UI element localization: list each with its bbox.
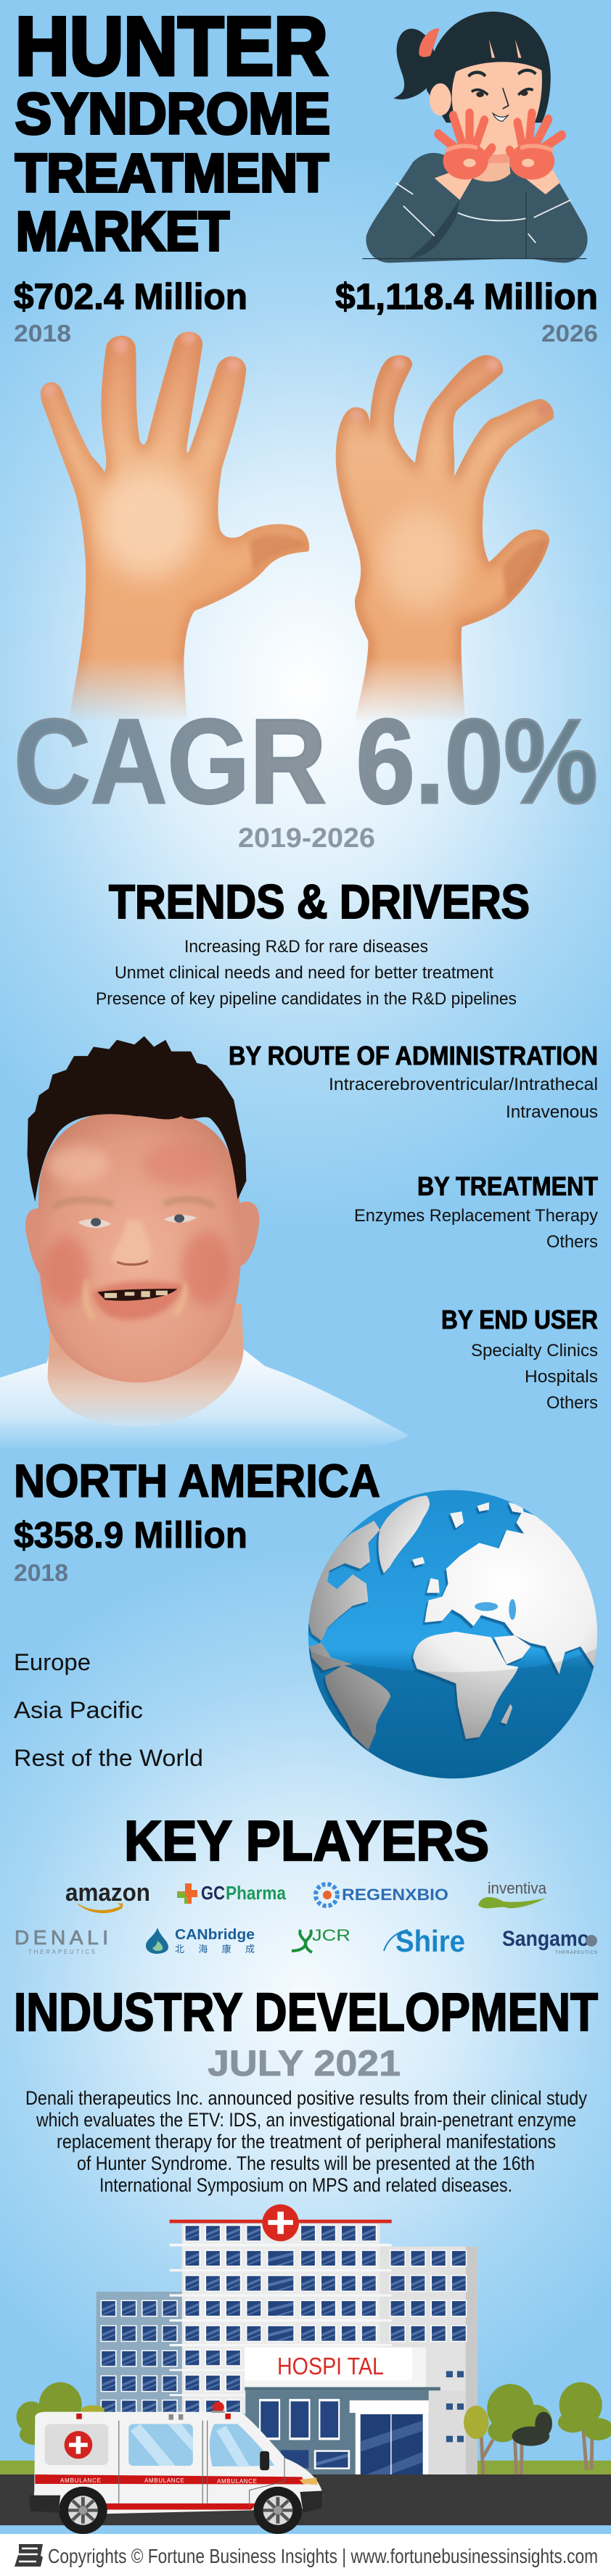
photo: smiling boy — [0, 1036, 409, 1450]
text block: drivers list — [96, 937, 517, 1009]
logo: Sangamo: THERAPEUTICS — [555, 1951, 597, 1955]
logo: inventiva — [478, 1879, 547, 1908]
logo: amazon: amazon — [65, 1879, 150, 1907]
segment: by treatment — [354, 1171, 598, 1252]
segment: by end user: Others — [546, 1393, 598, 1413]
segment: by route of administration — [229, 1041, 598, 1122]
panel: header — [14, 1, 598, 347]
text block: other regions: Rest of the World — [14, 1745, 203, 1771]
segment: by end user: Specialty Clinics — [471, 1341, 598, 1361]
logo: REGENXBIO: REGENXBIO — [342, 1886, 448, 1904]
ground — [0, 2461, 611, 2525]
panel: industry development — [14, 1982, 598, 2196]
logo: Denali Therapeutics: DENALI — [15, 1926, 108, 1949]
stat: north america value: 2018 — [14, 1559, 68, 1586]
segment: by treatment: Others — [546, 1232, 598, 1252]
stat: north america value — [14, 1514, 247, 1586]
logo: GC Pharma — [177, 1882, 286, 1904]
photo: right hand — [336, 355, 554, 725]
logo: Denali Therapeutics: THERAPEUTICS — [28, 1949, 95, 1955]
footer — [0, 2534, 611, 2576]
logo: CANbridge — [146, 1927, 255, 1954]
panel: regional — [14, 1455, 608, 1783]
text block: development details: of Hunter Syndrome. The results will be presented at the 16th — [77, 2152, 535, 2174]
stat: CAGR: 2019-2026 — [238, 823, 375, 854]
stat: 2026 market value: 2026 — [541, 320, 598, 347]
title: SYNDROME — [15, 81, 330, 146]
text block: other regions: Europe — [14, 1649, 91, 1675]
heading: trends and drivers: TRENDS & DRIVERS — [109, 875, 530, 928]
logo: JCR — [292, 1926, 350, 1952]
stat: 2026 market value: $1,118.4 Million — [335, 276, 598, 317]
segment: by end user: Hospitals — [525, 1367, 598, 1387]
segment: by route of administration: Intracerebroventricular/Intrathecal — [329, 1075, 598, 1094]
ambulance: AMBULANCE — [60, 2477, 101, 2484]
text block: drivers list: Increasing R&D for rare diseases — [184, 937, 428, 957]
text block: drivers list: Unmet clinical needs and need for better treatment — [115, 963, 493, 983]
segment: by treatment: Enzymes Replacement Therapy — [354, 1206, 598, 1226]
text block: other regions: Asia Pacific — [14, 1697, 143, 1723]
ambulance — [29, 2402, 323, 2534]
logo: Shire: Shire — [395, 1924, 465, 1958]
title — [15, 1, 330, 263]
photo: left hand — [41, 331, 309, 725]
stat: 2018 market value — [14, 276, 247, 347]
logo: GC Pharma: GC — [201, 1882, 225, 1904]
stat: 2018 market value: 2018 — [14, 320, 71, 347]
logo: CANbridge: 北海康成 — [175, 1944, 255, 1954]
title: TREATMENT — [15, 143, 329, 203]
stat: 2018 market value: $702.4 Million — [14, 276, 247, 317]
heading: key players: KEY PLAYERS — [124, 1809, 489, 1873]
text block: drivers list: Presence of key pipeline candidates in the R&D pipelines — [96, 989, 517, 1009]
text block: development details: International Symposium on MPS and related diseases. — [99, 2174, 512, 2196]
stat: north america value: $358.9 Million — [14, 1514, 247, 1556]
panel: trends and drivers — [96, 875, 530, 1009]
trees — [17, 2382, 611, 2474]
segment: by end user — [441, 1305, 598, 1413]
text block: other regions — [14, 1649, 203, 1771]
logo: JCR: JCR — [312, 1926, 350, 1944]
icon: girl showing hands — [362, 12, 588, 263]
stat: 2026 market value — [335, 276, 598, 347]
heading: july 2021: JULY 2021 — [208, 2043, 401, 2084]
logo: GC Pharma: Pharma — [226, 1882, 286, 1904]
logo: Sangamo: Sangamo — [502, 1927, 589, 1951]
heading: north america: NORTH AMERICA — [14, 1455, 380, 1507]
icon: fortune business insights logo — [15, 2544, 43, 2567]
panel: key players — [15, 1809, 597, 1958]
icon: globe — [306, 1490, 608, 1783]
logo: REGENXBIO — [316, 1884, 448, 1906]
illustration: hospital scene — [0, 2205, 611, 2534]
text block: development details — [25, 2087, 587, 2196]
panel: segmentation — [229, 1041, 598, 1413]
title: HUNTER — [15, 1, 328, 93]
hospital sign: HOSPI TAL — [277, 2353, 384, 2379]
title: MARKET — [16, 201, 229, 263]
ambulance: AMBULANCE — [144, 2477, 184, 2484]
logo: inventiva: inventiva — [488, 1879, 547, 1897]
ambulance: AMBULANCE — [217, 2478, 257, 2485]
logo: CANbridge: CANbridge — [175, 1927, 255, 1943]
hospital building — [97, 2205, 477, 2474]
segment: by route of administration: Intravenous — [506, 1102, 598, 1122]
